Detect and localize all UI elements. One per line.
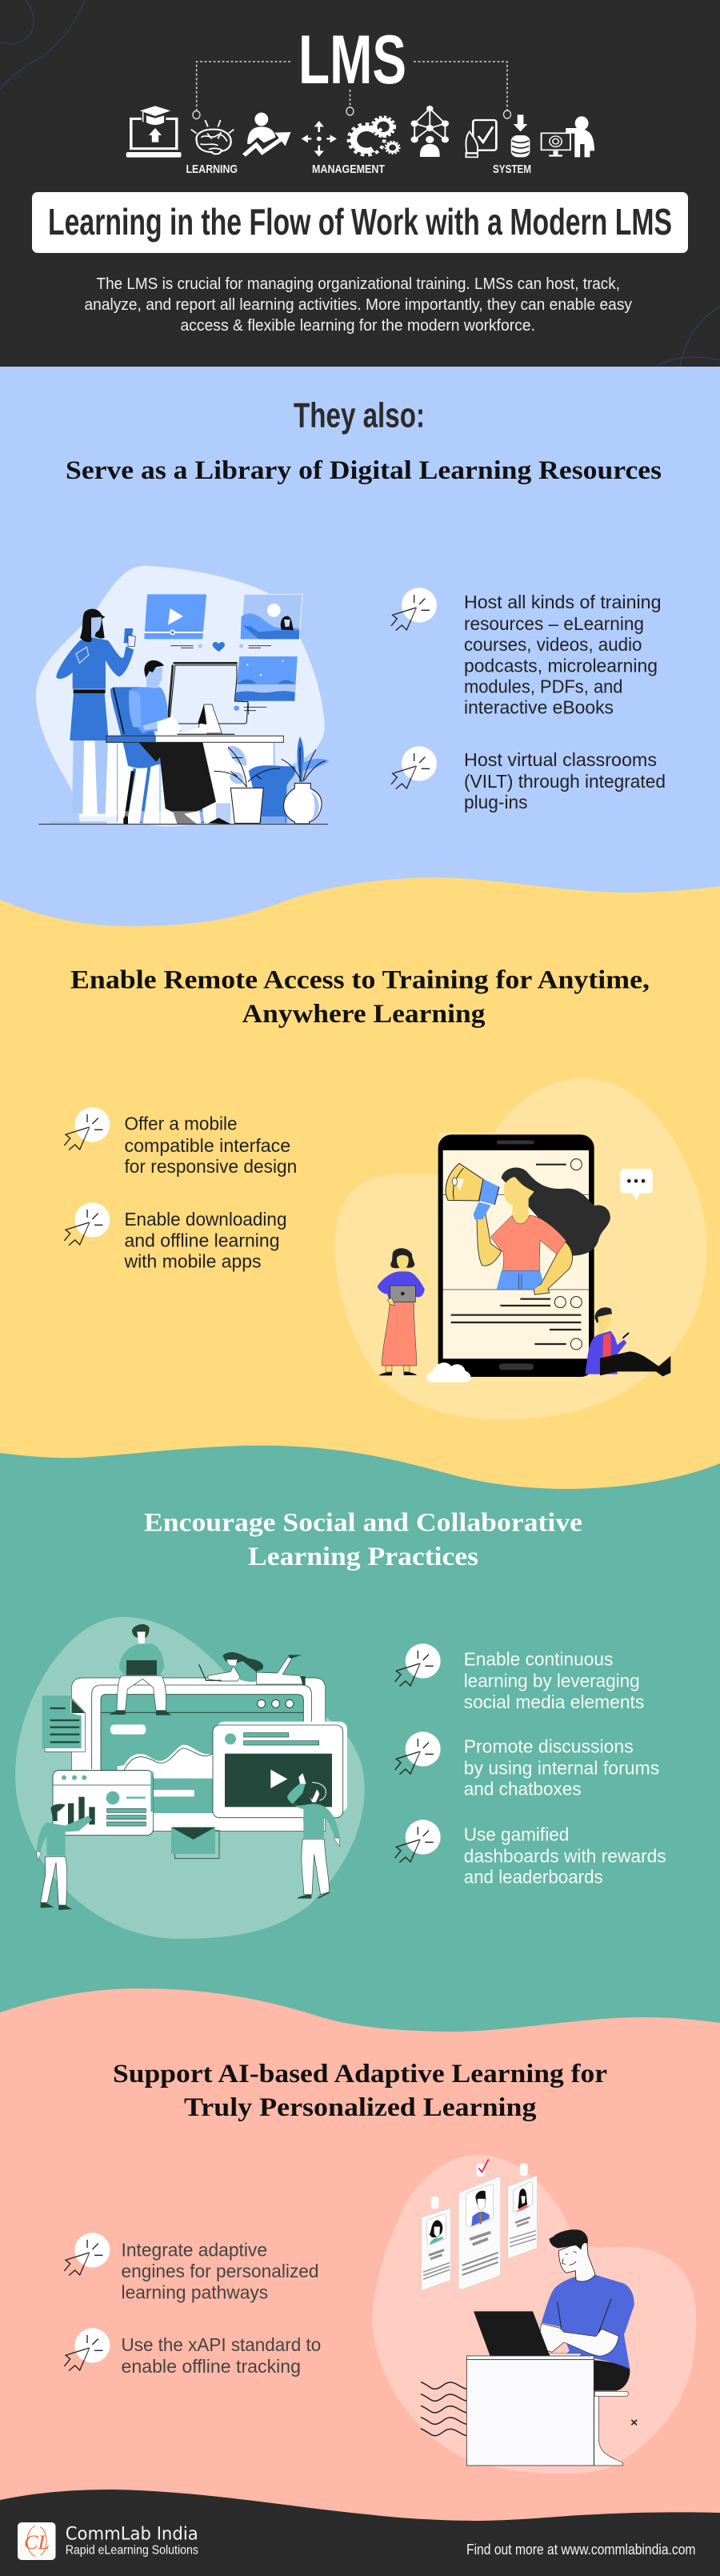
- panel: social and collaborative: [0, 1446, 720, 2033]
- heading: section 4: Support AI-based Adaptive Learning for: [113, 2060, 607, 2088]
- heading: LMS: LMS: [298, 22, 406, 98]
- blob: [372, 2155, 696, 2474]
- man's head: [550, 2229, 595, 2281]
- floor shadow and ground line: [38, 803, 328, 827]
- bullet: xAPI: [64, 2328, 321, 2377]
- heading: section 4: Truly Personalized Learning: [184, 2093, 537, 2122]
- profile card left: [422, 2197, 450, 2291]
- bullet: training resources: modules, PDFs, and: [464, 676, 622, 696]
- jeans: [497, 1270, 543, 1290]
- envelope: [171, 1828, 219, 1859]
- caption marks and heart: [170, 642, 271, 652]
- heading: They also: They also:: [294, 395, 425, 435]
- icon: gears: [349, 117, 399, 155]
- brand name: [66, 2525, 198, 2558]
- dashboard window: [53, 1771, 154, 1836]
- brand name: Rapid eLearning Solutions: [66, 2544, 198, 2558]
- lying person with laptop: [199, 1652, 306, 1685]
- bullet: xAPI: enable offline tracking: [122, 2356, 301, 2377]
- bullet: training resources: podcasts, microlearning: [464, 655, 658, 676]
- blob: [36, 566, 325, 825]
- woman's hair: [502, 1167, 610, 1256]
- icon: person with rising arrow: [244, 113, 291, 155]
- labels: Learning Management System: MANAGEMENT: [312, 163, 385, 176]
- heading: section 3: Learning Practices: [248, 1543, 478, 1571]
- bullet: discussions: by using internal forums: [464, 1757, 659, 1778]
- bullet: gamified dashboards: and leaderboards: [464, 1867, 603, 1888]
- icon: four-way arrows: [302, 121, 337, 157]
- bullet: social media: learning by leveraging: [464, 1671, 640, 1691]
- profile card right: [508, 2163, 537, 2259]
- speech bubble: [620, 1169, 653, 1200]
- phone: [438, 1134, 594, 1377]
- bush and plants: [214, 736, 330, 824]
- bullet: virtual classrooms: (VILT) through integrated: [464, 771, 666, 792]
- icons: LMS icon strip: [126, 106, 594, 158]
- sitting person with laptop: [109, 1624, 171, 1715]
- intro paragraph: [85, 275, 632, 335]
- panel: library of digital resources: [0, 367, 720, 961]
- bullet: training resources: Host all kinds of training: [464, 592, 661, 612]
- standing woman: [378, 1248, 425, 1375]
- heading: section 3: [144, 1508, 582, 1571]
- chair: [110, 687, 160, 768]
- bullet: adaptive engines: learning pathways: [122, 2281, 268, 2302]
- desk base white: [80, 742, 274, 823]
- desk: [466, 2356, 594, 2466]
- heading: section 2: [70, 965, 650, 1029]
- bullet: discussions: and chatboxes: [464, 1778, 582, 1799]
- man's arms: [540, 2324, 618, 2356]
- woman's head and neck: [504, 1177, 534, 1224]
- panel: footer: [0, 2490, 720, 2576]
- person pointing at chart: [36, 1804, 92, 1910]
- blob: [15, 1617, 365, 1939]
- profile card center: [458, 2159, 501, 2289]
- bullet: virtual classrooms: Host virtual classrooms: [464, 749, 657, 770]
- icon: monitor target with presenter: [542, 116, 594, 157]
- heading: section 2: Anywhere Learning: [242, 1000, 486, 1029]
- panel: AI-based adaptive learning: [0, 1988, 720, 2530]
- woman: [56, 609, 135, 740]
- illustration: team around dashboard: [15, 1617, 365, 1939]
- bullet: training resources: resources – eLearning: [464, 613, 644, 634]
- connector: end rings: [193, 107, 510, 118]
- illustration: man at desk with profile cards: [372, 2155, 696, 2474]
- woman's arm: [477, 1213, 573, 1294]
- bullet: adaptive engines: engines for personalized: [122, 2261, 318, 2281]
- heading: section 4: [113, 2060, 607, 2122]
- bullet: offline learning: Enable downloading: [125, 1209, 286, 1230]
- bullet: social media: [395, 1643, 644, 1712]
- man's legs: [138, 742, 216, 825]
- icon: network of people: [411, 106, 449, 157]
- desk top: [106, 736, 283, 823]
- connector: dotted lines: [197, 62, 507, 110]
- video window: [213, 1722, 347, 1818]
- shirt: [490, 1215, 566, 1270]
- bullet: offline learning: and offline learning: [125, 1230, 280, 1251]
- bullet: gamified dashboards: Use gamified: [464, 1824, 569, 1845]
- bullet: adaptive engines: [64, 2233, 318, 2302]
- bullet: social media: Enable continuous: [464, 1649, 613, 1670]
- bullet: offline learning: with mobile apps: [124, 1251, 261, 1272]
- bullet: discussions: [395, 1731, 659, 1799]
- bullet: gamified dashboards: dashboards with rewards: [464, 1846, 666, 1867]
- icon: database with download arrow: [511, 114, 530, 157]
- bullet: offline learning: [64, 1202, 286, 1272]
- blob: [334, 1078, 706, 1419]
- screen lines: [451, 1159, 582, 1350]
- bullet: training resources: interactive eBooks: [464, 696, 614, 717]
- labels: Learning Management System: LEARNING: [186, 163, 238, 176]
- bullet: mobile interface: compatible interface: [125, 1135, 290, 1156]
- megaphone: [446, 1163, 499, 1219]
- sitting man: [586, 1307, 670, 1376]
- icon: brain: [191, 120, 234, 154]
- panel: remote access: [0, 877, 720, 1521]
- video card: [144, 594, 206, 639]
- bullet: virtual classrooms: [391, 746, 666, 813]
- heading: section 1: Serve as a Library of Digital Learning Resources: [66, 456, 662, 485]
- man's torso and head: [129, 660, 234, 735]
- bullet: training resources: [391, 588, 661, 717]
- wavy lines: [421, 2382, 466, 2436]
- laptop: [474, 2311, 582, 2356]
- illustration: woman and man at computer: [36, 566, 330, 827]
- bullet: discussions: Promote discussions: [464, 1735, 634, 1756]
- stool: [594, 2391, 628, 2466]
- intro paragraph: The LMS is crucial for managing organizational training. LMSs can host, track,: [96, 275, 620, 293]
- intro paragraph: access & flexible learning for the modern workforce.: [181, 317, 535, 335]
- person pointing at video: [287, 1773, 340, 1899]
- monitor: [168, 663, 266, 733]
- cloud: [426, 1362, 471, 1382]
- bullet: social media: social media elements: [464, 1691, 644, 1712]
- bullet: mobile interface: [64, 1107, 297, 1177]
- man's shirt: [542, 2275, 634, 2369]
- bullet: mobile interface: for responsive design: [125, 1156, 297, 1177]
- panel: header: [0, 0, 720, 367]
- small x mark: [631, 2420, 637, 2425]
- big monitor: [71, 1678, 326, 1831]
- woman's legs: [72, 739, 108, 814]
- bullet: gamified dashboards: [395, 1820, 666, 1888]
- intro paragraph: analyze, and report all learning activities. More importantly, they can enable easy: [85, 296, 632, 314]
- bullet: mobile interface: Offer a mobile: [125, 1113, 237, 1134]
- heading: section 2: Enable Remote Access to Training for Anytime,: [70, 965, 650, 994]
- brand name: CommLab India: [66, 2525, 198, 2545]
- bullet: virtual classrooms: plug-ins: [464, 792, 528, 813]
- title box: [32, 192, 688, 253]
- illustration: phone with woman and megaphone: [334, 1078, 706, 1419]
- bullet: xAPI: Use the xAPI standard to: [122, 2334, 321, 2355]
- labels: Learning Management System: SYSTEM: [493, 163, 531, 176]
- man's shorts: [594, 2360, 630, 2391]
- heading: section 3: Encourage Social and Collaborative: [144, 1508, 582, 1537]
- logo: CommLab India: CL: [24, 2532, 50, 2554]
- document: [42, 1695, 86, 1751]
- icon: laptop with graduation cap: [126, 106, 182, 158]
- labels: Learning Management System: [186, 163, 531, 176]
- bullet: training resources: courses, videos, audio: [464, 634, 642, 655]
- logo: CommLab India: [18, 2522, 56, 2560]
- bullet: adaptive engines: Integrate adaptive: [122, 2239, 267, 2260]
- night card: [235, 656, 298, 701]
- icon: tablet with checkmark: [466, 120, 496, 157]
- photo card: [241, 594, 302, 639]
